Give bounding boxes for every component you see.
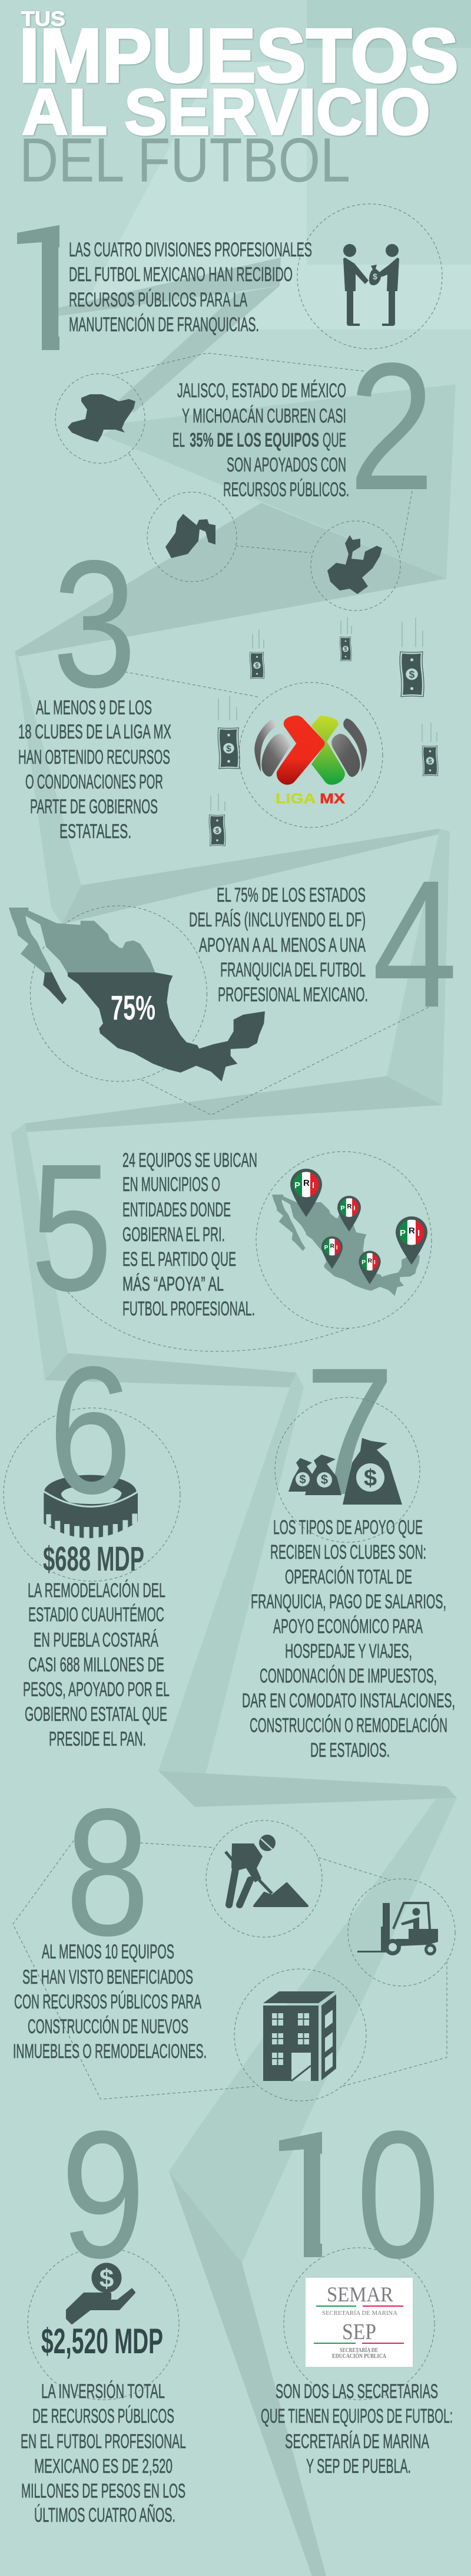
icon: falling bill c: $ [409,669,415,680]
text 7 [242,1516,455,1762]
text 4: APOYAN A AL MENOS A UNA [199,934,366,956]
text 5: ENTIDADES DONDE [122,1199,231,1221]
PRI pin 4: P [361,1259,366,1266]
text 5: MÁS “APOYA” AL [122,1273,224,1295]
icon: money bags: $ [321,1472,328,1487]
text 9: DE RECURSOS PÚBLICOS [32,2405,174,2427]
title line: del futbol: DEL FÚTBOL [19,126,350,195]
icon: two people exchanging money bag [343,244,399,326]
text 1: MANUTENCIÓN DE FRANQUICIAS. [69,314,259,336]
PRI pin 1 [290,1169,322,1217]
icon: falling bill c [400,652,424,697]
text 6: CASI 688 MILLONES DE [28,1654,164,1676]
text 8: AL MENOS 10 EQUIPOS [42,1941,174,1963]
icon: money bags: $ [364,1465,377,1491]
text 2: EL [173,429,185,451]
text 2: Y MICHOACÁN CUBREN CASI [182,405,346,427]
text 5 [122,1149,257,1320]
dashed circles 2 [55,374,400,611]
PRI pin 4: R [368,1258,373,1264]
amount 2520 MDP: $2,520 MDP [41,2321,163,2361]
text 4 [189,884,368,1006]
number 7: 7 [304,1330,395,1533]
connector lines 2 [115,353,412,554]
dashed circle 9 [28,2248,179,2400]
connector line 3 [125,672,260,697]
small map of Mexico [272,1195,420,1296]
section 2 [55,325,434,611]
amount 688 MDP: $688 MDP [43,1540,144,1578]
dashed circle 1 [297,204,442,349]
text 5: EN MUNICIPIOS O [122,1173,220,1196]
text 1 [69,239,312,336]
text 5: FUTBOL PROFESIONAL. [122,1298,255,1320]
number 4: 4 [372,843,457,1045]
PRI pin 3 [321,1236,343,1269]
text 5: 24 EQUIPOS SE UBICAN [122,1149,257,1172]
text 9 [21,2380,186,2526]
text 7: DE ESTADIOS. [310,1739,390,1762]
PRI pin 3: R [330,1243,335,1249]
number 9: 9 [61,2093,145,2296]
number 3: 3 [52,523,137,725]
text 6: LA REMODELACIÓN DEL [28,1579,165,1602]
icon: falling bill f [209,815,225,846]
text 2: JALISCO, ESTADO DE MÉXICO [177,380,346,402]
icon: Jalisco [327,535,382,594]
text 6: PESOS, APOYADO POR EL [23,1678,170,1701]
PRI pin 2: R [347,1203,351,1210]
icon: Michoacan [68,394,135,442]
section 6 [4,1329,180,1750]
number 10: 1 [254,2093,362,2296]
Liga MX logo [254,715,367,807]
number 5: 5 [31,1126,112,1329]
icon: falling bill e [422,746,438,776]
section 4 [9,882,453,1115]
section 9 [21,2093,186,2526]
icon: falling bill d [218,728,240,768]
text 6: GOBIERNO ESTATAL QUE [25,1703,167,1726]
section 1 [17,204,443,350]
text 2: RECURSOS PÚBLICOS. [223,479,349,501]
text 9: ÚLTIMOS CUATRO AÑOS. [34,2504,175,2526]
PRI pin 4: I [374,1259,376,1266]
text 4: PROFESIONAL MEXICANO. [218,984,368,1006]
connector line 5 [68,1292,349,1351]
text 2: SON APOYADOS CON [227,454,346,476]
section 8 [13,1771,455,2101]
icon: Estado de Mexico [165,514,215,558]
PRI pin 5: P [400,1228,406,1238]
text 2 [173,380,349,501]
icon: building [263,1991,336,2081]
text 1: RECURSOS PÚBLICOS PARA LA [69,289,247,311]
SEMAR and SEP logos: SEMAR [327,2283,393,2306]
dashed circle 4 [31,906,207,1081]
dashed circle 10 [284,2248,434,2400]
section 3 [18,523,438,846]
SEMAR and SEP logos: SEP [342,2320,376,2344]
SEMAR and SEP logos [306,2278,413,2367]
icon: falling bill f: $ [215,827,220,835]
text 4: FRANQUICIA DEL FUTBOL [220,959,366,981]
text 8: CON RECURSOS PÚBLICOS PARA [14,1991,201,2013]
PRI pin 5 [396,1216,427,1265]
text 3: PARTE DE GOBIERNOS [30,796,158,818]
text 2: QUE [323,429,346,451]
title line: tus: TUS [21,8,65,31]
text 3: 18 CLUBES DE LA LIGA MX [18,721,171,743]
number 8: 8 [65,1771,150,1974]
PRI pin 2 [337,1196,361,1232]
PRI pin 1: R [303,1178,310,1188]
text 5: ES EL PARTIDO QUE [122,1248,236,1271]
PRI pin 1: P [294,1180,300,1190]
icon: forklift [357,1903,438,1955]
section 5 [37,1152,432,1352]
text 3: ESTATALES. [59,820,131,843]
PRI pin 5: I [417,1228,420,1238]
PRI pin 2: P [340,1205,345,1212]
SEMAR and SEP logos: SECRETARÍA DE MARINA [322,2310,397,2317]
dashed circle 7 [275,1397,420,1542]
icon: falling bill b: $ [344,646,347,652]
icon: hand with coin: $ [99,2264,114,2293]
PRI pin 3: P [324,1245,329,1251]
Liga MX wordmark: LIGA MX [276,791,345,807]
connector line 4 [141,1007,430,1115]
number 10: 0 [356,2093,440,2296]
title line: impuestos: IMPUESTOS [19,12,459,98]
icon: falling bill e: $ [428,758,432,765]
PRI pin 4 [359,1251,381,1284]
icon: construction worker [225,1835,307,1906]
number 6: 6 [48,1329,132,1532]
dashed circle 5 [256,1152,432,1328]
text 10 [261,2380,453,2478]
map of Mexico, 75 percent shaded [9,908,265,1081]
title [19,8,459,195]
icon: falling bill a: $ [256,663,259,669]
icon: stadium [44,1475,138,1539]
icon: hand with coin [67,2263,134,2323]
section 10 [261,2130,452,2473]
PRI pin 2: I [353,1205,355,1212]
text 3: O CONDONACIONES POR [25,771,163,793]
dashed circle 6 [4,1408,180,1581]
dashed circle 3 [239,682,383,827]
text 8: CONSTRUCCIÓN DE NUEVOS [28,2016,188,2038]
speed lines [211,617,437,811]
icon: two people exchanging money bag: $ [373,272,377,281]
text 3: AL MENOS 9 DE LOS [36,697,152,719]
SEMAR and SEP logos: SECRETARÍA DE [340,2347,378,2354]
connector lines 8 [13,1841,447,2099]
text 9: MILLONES DE PESOS EN LOS [21,2480,185,2502]
text 1: DEL FUTBOL MEXICANO HAN RECIBIDO [69,263,293,286]
text 8: INMUEBLES O REMODELACIONES. [13,2040,207,2063]
icon: falling bill d: $ [226,744,231,754]
text 6: PRESIDE EL PAN. [49,1728,146,1750]
text 8 [13,1941,207,2063]
text 6 [23,1579,170,1750]
SEMAR and SEP logos: EDUCACIÓN PÚBLICA [332,2353,387,2360]
text 2: 35% DE LOS EQUIPOS [190,429,319,451]
text 8: SE HAN VISTO BENEFICIADOS [22,1966,193,1988]
text 4: EL 75% DE LOS ESTADOS [217,884,366,906]
icon: falling bill a [250,652,264,678]
text 6: EN PUEBLA COSTARÁ [34,1629,158,1651]
number 1 [17,225,59,350]
icon: falling bill b [340,637,351,661]
PRI pin 5: R [409,1226,415,1236]
text 3: HAN OBTENIDO RECURSOS [18,746,170,768]
title line: al servicio: AL SERVICIO [22,76,430,149]
icon: money bags [288,1438,402,1505]
75 percent label: 75% [111,989,155,1027]
PRI pin 3: I [336,1245,338,1251]
text 9: LA INVERSIÓN TOTAL [41,2380,165,2403]
text 9: EN EL FUTBOL PROFESIONAL [21,2430,186,2453]
number 2: 2 [349,325,434,528]
text 6: ESTADIO CUAUHTÉMOC [28,1604,164,1626]
text 9: MEXICANO ES DE 2,520 [34,2455,173,2478]
PRI pin 1: I [312,1180,314,1190]
number 10 [279,2130,434,2259]
text 5: GOBIERNA EL PRI. [122,1223,225,1246]
section 7 [242,1330,455,1762]
dashed circles 8 [206,1820,455,2101]
icon: money bags: $ [299,1473,306,1486]
text 3 [18,697,171,843]
